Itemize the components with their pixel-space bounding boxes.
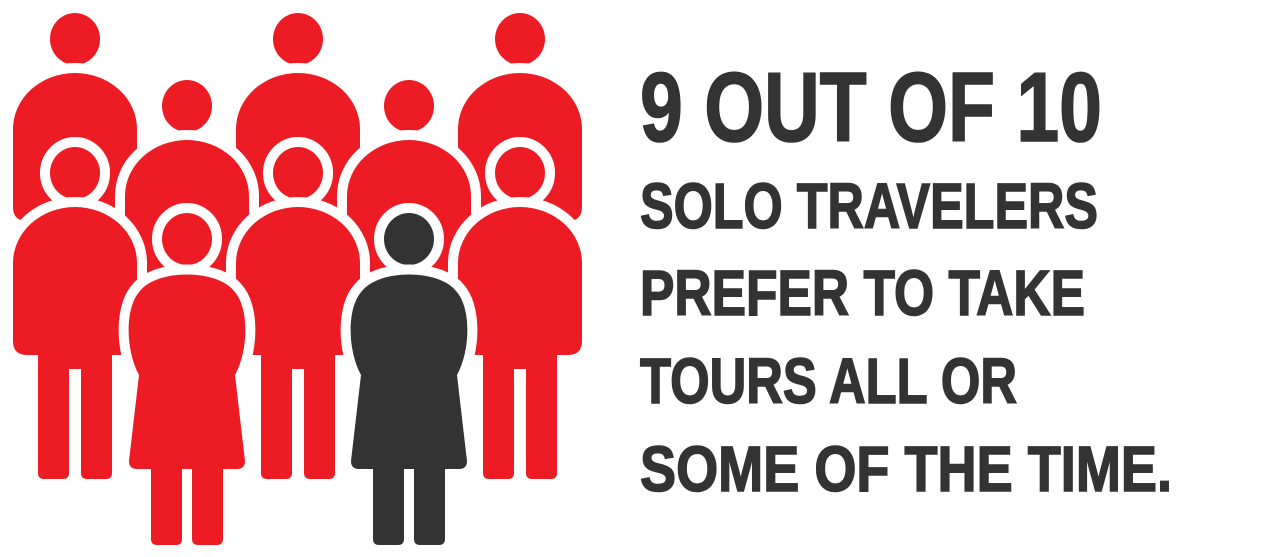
front row women [129, 213, 467, 545]
line 5: SOME OF THE TIME. [640, 433, 1172, 505]
line 2: SOLO TRAVELERS [640, 170, 1098, 242]
statistic text [640, 52, 1172, 505]
line 4: TOURS ALL OR [640, 345, 1017, 417]
second row people [125, 80, 471, 412]
back row men [13, 13, 582, 345]
headline: 9 OUT OF 10 [640, 52, 1102, 162]
third row men [13, 147, 582, 479]
people group illustration [13, 13, 582, 545]
line 3: PREFER TO TAKE [640, 257, 1085, 329]
